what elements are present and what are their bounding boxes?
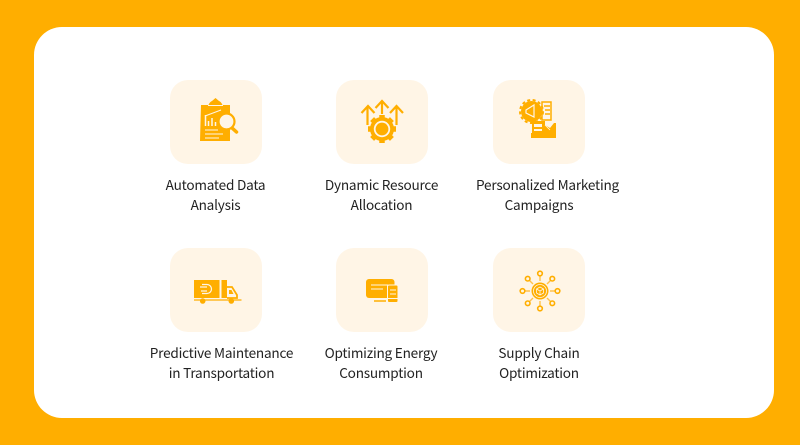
label: Supply Chain (498, 342, 580, 362)
item: Dynamic Resource Allocation (325, 80, 438, 214)
item: Dynamic Resource Allocation: Allocation (351, 194, 412, 214)
item: Predictive Maintenance in Transportation: in Transportation (169, 362, 274, 382)
label: Predictive Maintenance (150, 342, 293, 362)
item: Personalized Marketing Campaigns: Campaigns (505, 194, 573, 214)
label: Personalized Marketing (476, 174, 620, 194)
item: Supply Chain Optimization (493, 248, 585, 382)
icon tile: supply chain (493, 248, 585, 332)
label: Automated Data (166, 174, 265, 194)
icon: hub with nodes (520, 271, 560, 311)
icon tile: resource allocation (336, 80, 428, 164)
label: Optimizing Energy (325, 342, 438, 362)
icon tile: energy (336, 248, 428, 332)
icon tile: data analysis (170, 80, 262, 164)
item: Supply Chain Optimization: Optimization (499, 362, 579, 382)
item: Predictive Maintenance in Transportation (150, 248, 293, 382)
icon tile: marketing (493, 80, 585, 164)
item: Automated Data Analysis: Analysis (191, 194, 240, 214)
icon: megaphone badge, document and phone (520, 100, 556, 138)
label: Dynamic Resource (325, 174, 438, 194)
icon: clipboard with magnifier (200, 98, 236, 141)
icon tile: transportation (170, 248, 262, 332)
item: Automated Data Analysis (166, 80, 265, 214)
icon: monitor and phone (366, 279, 398, 302)
item: Optimizing Energy Consumption (325, 248, 438, 382)
item: Personalized Marketing Campaigns (476, 80, 620, 214)
icon: gear with arrows (362, 101, 403, 143)
item: Optimizing Energy Consumption: Consumption (339, 362, 423, 382)
icon: delivery truck (194, 280, 242, 304)
